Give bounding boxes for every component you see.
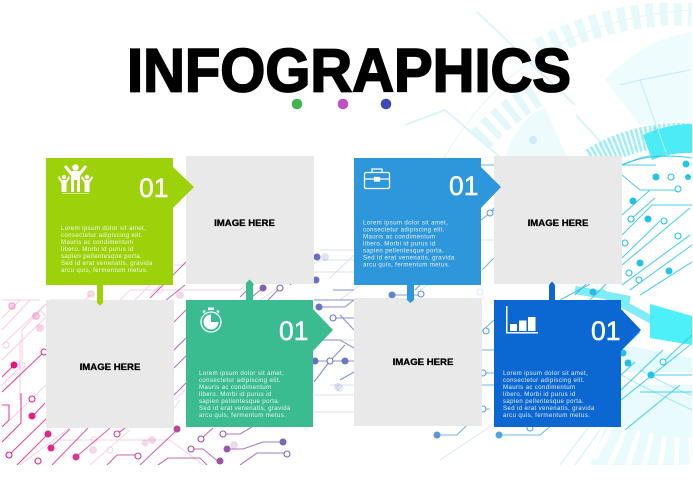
body text: sapien pellentesque porta. — [61, 253, 142, 260]
image placeholder 1 — [186, 156, 314, 284]
icon: briefcase — [364, 169, 390, 188]
body text: consectetur adipiscing elit. — [199, 377, 281, 384]
body text: consectetur adipiscing elit. — [503, 377, 585, 384]
body text: sapien pellentesque porta. — [363, 248, 444, 254]
panel: green card — [46, 158, 194, 306]
decorative coloured dots — [292, 99, 391, 109]
body text: Mauris ac condimentum — [61, 239, 133, 246]
image placeholder 4 — [494, 156, 622, 284]
body text: Sed id erat venenatis, gravida — [61, 260, 153, 267]
body text: Lorem ipsum dolor sit amet, — [503, 370, 588, 377]
number: 01 — [279, 316, 308, 346]
body text: libero. Morbi id purus id — [199, 391, 272, 398]
body text: Sed id erat venenatis, gravida — [363, 254, 455, 262]
image placeholder 2 — [46, 300, 174, 428]
body text: Mauris ac condimentum — [503, 384, 575, 391]
body text: sapien pellentesque porta. — [199, 398, 280, 405]
pale circuit traces — [2, 240, 494, 465]
body text: consectetur adipiscing elit. — [363, 226, 445, 234]
body text: Lorem ipsum dolor sit amet, — [363, 220, 448, 226]
body text: arcu quis, fermentum metus. — [363, 262, 450, 268]
panel: blue card — [354, 158, 501, 303]
body text: libero. Morbi id purus id — [503, 391, 576, 398]
body text: Lorem ipsum dolor sit amet, — [199, 370, 284, 377]
image placeholder 3 — [354, 298, 482, 426]
image placeholder 2: IMAGE HERE — [80, 362, 141, 373]
image placeholder 4: IMAGE HERE — [528, 218, 589, 229]
pale upper bands — [605, 32, 692, 125]
body text: Sed id erat venenatis, gravida — [199, 405, 291, 412]
strong circuit traces — [2, 156, 692, 465]
number: 01 — [591, 316, 620, 346]
title: INFOGRAPHICS — [127, 36, 571, 104]
icon: people with raised arms — [58, 164, 93, 194]
image placeholder 1: IMAGE HERE — [214, 218, 275, 229]
image placeholder 3: IMAGE HERE — [393, 357, 454, 368]
icon: bar chart — [506, 306, 538, 334]
body text: consectetur adipiscing elit. — [61, 232, 143, 239]
circuit nodes — [10, 160, 691, 464]
body text: Mauris ac condimentum — [199, 384, 271, 391]
bright radial stripes — [592, 135, 692, 160]
number: 01 — [449, 171, 478, 201]
panel: teal card — [186, 280, 333, 427]
panel: dark blue card — [494, 282, 641, 427]
body text: arcu quis, fermentum metus. — [199, 412, 286, 419]
body text: sapien pellentesque porta. — [503, 398, 584, 405]
body text: arcu quis, fermentum metus. — [61, 267, 148, 274]
body text: arcu quis, fermentum metus. — [503, 412, 590, 419]
number: 01 — [139, 173, 168, 203]
body text: Lorem ipsum dolor sit amet, — [61, 225, 146, 232]
body text: Sed id erat venenatis, gravida — [503, 405, 595, 412]
pale bottom sector — [590, 385, 692, 465]
body text: libero. Morbi id purus id — [363, 240, 436, 248]
icon: stopwatch — [201, 308, 221, 332]
body text: Mauris ac condimentum — [363, 234, 435, 240]
body text: libero. Morbi id purus id — [61, 246, 134, 253]
